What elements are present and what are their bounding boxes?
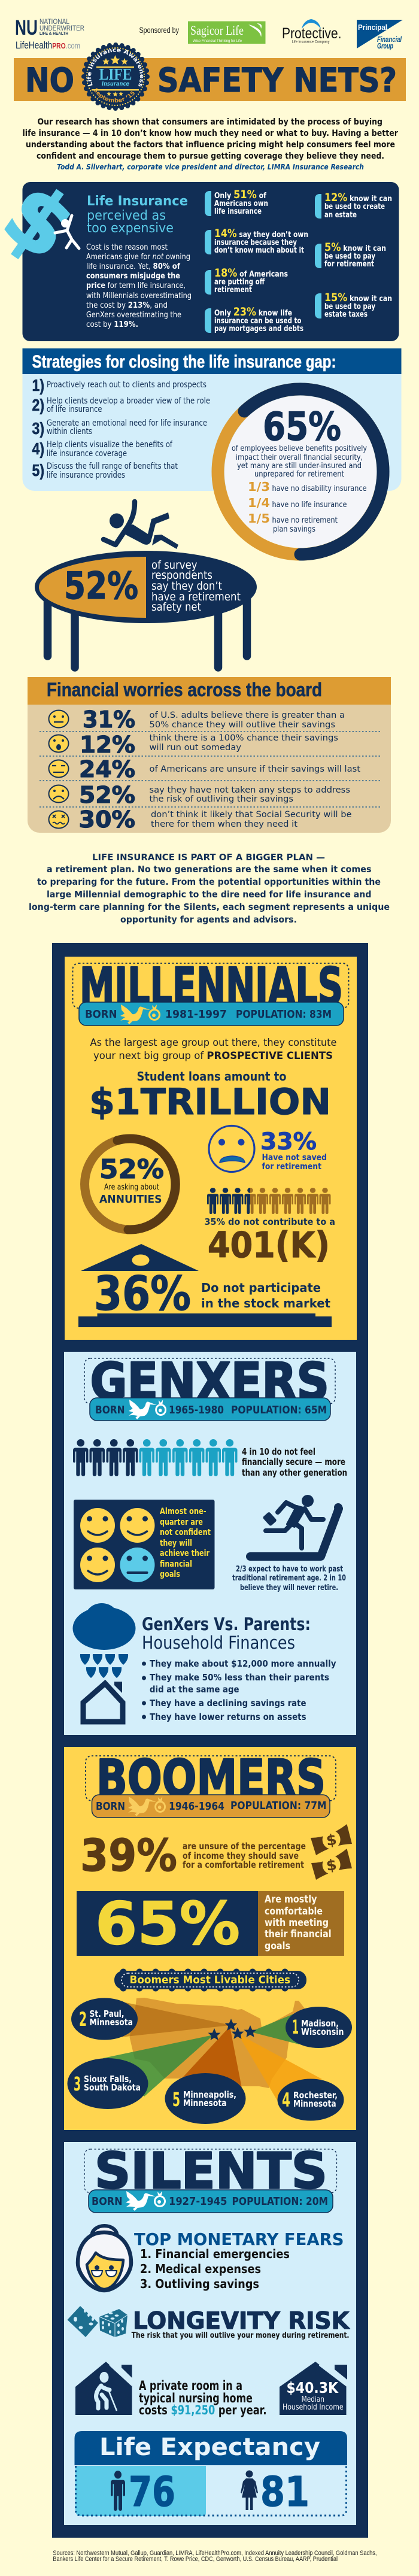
- employee benefits text: yet many are still under-insured and: [237, 462, 362, 471]
- logo: Protective: [282, 19, 341, 44]
- stats: middle column: insurance can be used to: [214, 317, 302, 326]
- stat brackets: [205, 191, 321, 333]
- people chart: 35% do not contribute: 35% do not contribute to a: [205, 1216, 335, 1227]
- city 1: Madison: 1: [292, 2016, 299, 2038]
- student loans stat: Student loans amount to: [136, 1069, 286, 1084]
- row: 12%: [49, 732, 338, 758]
- logo: Sagicor Life: Wise Financial Thinking for Life: [193, 39, 242, 43]
- stock market building: [78, 1244, 332, 1327]
- GenXers vs parents: GenXers Vs. Parents:: [142, 1614, 311, 1634]
- stock market building: Do not participate: [201, 1281, 321, 1295]
- stats: right column: be used to pay: [324, 252, 375, 261]
- people chart: 35% do not contribute: [205, 1188, 335, 1266]
- badge: Life Insurance Awareness Month: September ’15: [94, 88, 135, 103]
- row: 12%: think there is a 100% chance their savings: [150, 733, 338, 743]
- strategies header: Strategies for closing the life insurance gap:: [32, 352, 336, 372]
- smiley box: not confident: goals: [160, 1570, 180, 1579]
- row: 12%: 12%: [80, 732, 135, 758]
- row: 24%: of Americans are unsure if their savings will last: [150, 764, 361, 774]
- city 2: St. Paul: 2: [79, 2008, 87, 2031]
- cost paragraph: the cost by 213%, and: [86, 301, 168, 310]
- logo: Principal Financial Group: Principal: [358, 23, 387, 32]
- 65% comfortable stat: comfortable: [265, 1906, 323, 1917]
- logo: Protective: Protective.: [282, 25, 341, 42]
- 65% comfortable stat: goals: [265, 1940, 290, 1952]
- people chart: 4 in 10: 4 in 10 do not feel: [242, 1446, 315, 1457]
- row: 31%: of U.S. adults believe there is greater than a: [150, 711, 345, 720]
- stats: middle column: [214, 188, 308, 333]
- logo: Principal Financial Group: [357, 20, 403, 50]
- city 4: Rochester: [278, 2079, 344, 2120]
- icon: runner on treadmill: 2/3 expect to have to work past: [236, 1565, 343, 1574]
- stats: right column: estate taxes: [324, 310, 368, 319]
- house: median household income: Household Income: [283, 2403, 344, 2412]
- GenXers vs parents: did at the same age: [150, 1684, 239, 1695]
- smiley box: not confident: achieve their: [160, 1549, 210, 1558]
- city 5: Minneapolis: 5: [172, 2088, 180, 2111]
- generations frame: [52, 943, 368, 2538]
- icon: runner on treadmill: [232, 1495, 346, 1592]
- cost paragraph: GenXers overestimating the: [86, 310, 181, 320]
- stats: middle column: Americans own: [214, 199, 268, 208]
- nursing home cost: [139, 2378, 267, 2417]
- Millennials title: POPULATION: 83M: [236, 1008, 332, 1021]
- logo: Principal Financial Group: Financial: [377, 35, 402, 44]
- strategy list: 5): [32, 461, 44, 480]
- employee benefits text: impact their overall financial security,: [236, 453, 363, 462]
- strategy list: 3): [32, 419, 44, 438]
- 65% comfortable stat: 65%: [95, 1890, 240, 1958]
- nursing home cost: typical nursing home: [139, 2391, 253, 2405]
- panel: Silents: [64, 2142, 356, 2525]
- smiley box: not confident: quarter are: [160, 1518, 203, 1527]
- prospective clients text: [90, 1037, 336, 1062]
- stats: middle column: pay mortgages and debts: [214, 324, 303, 333]
- logo: LifeHealthPro.com: LifeHealthPRO.com: [16, 40, 80, 51]
- GenXers vs parents: They have a declining savings rate: [150, 1698, 306, 1709]
- stats: middle column: insurance because they: [214, 238, 297, 247]
- row: 52%: the risk of outliving their savings: [150, 794, 293, 804]
- strategy list: Proactively reach out to clients and prospects: [47, 380, 207, 390]
- sad face: 33% have not saved: for retirement: [262, 1162, 321, 1172]
- trampoline: 52% no safety net: 52%: [64, 564, 138, 608]
- panel: GenXers: [64, 1352, 356, 1735]
- stats: right column: for retirement: [324, 260, 374, 269]
- sad face: 33% have not saved: Have not saved: [262, 1153, 327, 1163]
- top monetary fears: [134, 2229, 344, 2291]
- icon: grandmother: [78, 2226, 131, 2290]
- map: livable cities: [67, 1998, 352, 2124]
- house: median household income: Median: [302, 2395, 324, 2404]
- stats: right column: 15% know it can: [324, 291, 392, 304]
- livable cities badge: Boomers Most Livable Cities: [129, 1974, 290, 1986]
- cost paragraph: consumers misjudge the: [86, 271, 180, 281]
- logo: National Underwriter: [15, 16, 84, 40]
- 39% unsure stat: for a comfortable retirement: [183, 1859, 304, 1870]
- cost paragraph: Americans give for not owning: [86, 252, 190, 262]
- logo: Sagicor Life: [188, 22, 266, 44]
- sad face: 33% have not saved: [209, 1125, 327, 1172]
- sources: Bankers Life Center for a Secure Retirement, T. Rowe Price, CDC, Genworth, U.S. Census Bureau, AARP, Prudential: [53, 2556, 338, 2563]
- stats: right column: 12% know it can: [324, 191, 392, 204]
- map beams: [103, 2002, 322, 2101]
- Millennials title: 1981-1997: [165, 1008, 227, 1021]
- row: 30%: don’t think it likely that Social Security will be: [151, 810, 352, 820]
- GenXers title: 1965-1980: [169, 1404, 224, 1416]
- 65% comfortable stat: with meeting: [265, 1917, 329, 1929]
- title banner: [14, 58, 406, 101]
- employee benefits text: unprepared for retirement: [254, 470, 344, 479]
- heading: Life Insurance: [87, 194, 188, 209]
- cost paragraph: cost by 119%.: [86, 320, 138, 329]
- logo: National Underwriter: NU: [15, 16, 38, 40]
- Silents title: POPULATION: 20M: [232, 2195, 328, 2208]
- 39% unsure stat: 39%: [80, 1830, 177, 1882]
- city 4: Rochester: 4: [282, 2089, 290, 2111]
- title banner: NO: [25, 61, 74, 99]
- city 3: Sioux Falls: Sioux Falls,: [84, 2074, 132, 2085]
- text block: life insurance is part of a bigger plan: [29, 852, 390, 925]
- cost paragraph: life insurance. Yet, 80% of: [86, 262, 180, 271]
- top monetary fears: 2. Medical expenses: [140, 2262, 261, 2276]
- Millennials title: BORN: [85, 1008, 117, 1021]
- icon: nursing home: [75, 2362, 132, 2415]
- icon: dollar bills: $: [325, 1831, 338, 1849]
- city 1: Madison: Wisconsin: [301, 2026, 344, 2037]
- intro quote: [23, 117, 398, 171]
- survey text: of survey: [151, 559, 198, 572]
- stats: right column: be used to create: [324, 202, 385, 211]
- icon: dollar bills: [311, 1824, 352, 1880]
- city 2: St. Paul: St. Paul,: [90, 2008, 125, 2019]
- panel: Millennials: [65, 957, 357, 1340]
- panel: strategies for closing the gap: [23, 348, 401, 491]
- stats: middle column: don’t know much about it: [214, 246, 304, 255]
- stock market building: in the stock market: [201, 1296, 330, 1310]
- longevity risk: LONGEVITY RISK: [133, 2308, 350, 2335]
- panel: life insurance perceived as too expensive: [0, 164, 399, 341]
- stats: middle column: Only 51% of: [214, 188, 266, 201]
- smiley box: not confident: Almost one-: [160, 1507, 207, 1516]
- survey text: say they don’t: [151, 579, 222, 593]
- row: 52%: say they have not taken any steps to address: [150, 785, 350, 795]
- GenXers title: BORN: [95, 1404, 125, 1416]
- logo: Principal Financial Group: Group: [377, 41, 393, 50]
- icon: dice: [67, 2306, 127, 2337]
- stats: middle column: 18% of Americans: [214, 266, 288, 280]
- Boomers title: POPULATION: 77M: [230, 1800, 327, 1812]
- smiley box: not confident: financial: [160, 1559, 192, 1569]
- stats: right column: [324, 191, 392, 319]
- GenXers vs parents: They make about $12,000 more annually: [150, 1658, 336, 1669]
- city 2: St. Paul: [71, 1998, 138, 2040]
- city 2: St. Paul: Minnesota: [90, 2017, 133, 2028]
- city 1: Madison: Madison,: [301, 2018, 339, 2029]
- prospective clients text: your next big group of PROSPECTIVE CLIENTS: [93, 1050, 333, 1062]
- male 76: 76: [129, 2468, 175, 2516]
- GenXers title: GENXERS: [90, 1352, 329, 1412]
- cost paragraph: [86, 242, 192, 329]
- stats: middle column: 14% say they don’t own: [214, 227, 308, 240]
- strategy list: life insurance provides: [47, 471, 125, 480]
- donut: 52% annuities: Are asking about: [104, 1183, 159, 1192]
- logo: National Underwriter: NATIONAL: [40, 17, 69, 26]
- city 5: Minneapolis: Minneapolis,: [183, 2089, 236, 2100]
- male 76: [111, 2468, 175, 2516]
- text block: life insurance is part of a bigger plan: opportunity for agents and advisors.: [120, 914, 297, 925]
- title banner: SAFETY NETS?: [157, 61, 397, 99]
- 39% unsure stat: are unsure of the percentage: [183, 1841, 306, 1852]
- Boomers title: BORN: [96, 1800, 125, 1813]
- fractions: have no retirement: [272, 516, 338, 525]
- 39% unsure stat: of income they should save: [183, 1850, 299, 1861]
- strategy list: Help clients visualize the benefits of: [47, 440, 173, 450]
- city 3: Sioux Falls: South Dakota: [84, 2082, 141, 2093]
- stats: middle column: are putting off: [214, 278, 265, 287]
- icon: runner on treadmill: believe they will never retire.: [240, 1583, 338, 1592]
- donut: 65% of employees: 65%: [263, 405, 341, 450]
- text block: life insurance is part of a bigger plan: a retirement plan. No two generations are the same when it comes: [47, 864, 372, 875]
- text block: life insurance is part of a bigger plan: to preparing for the future. From the potential opportunities within the: [37, 876, 381, 887]
- donut: 52% annuities: [85, 1139, 176, 1230]
- cost paragraph: Cost is the reason most: [86, 242, 168, 252]
- sad face: 33% have not saved: 33%: [260, 1128, 317, 1155]
- fractions: 1/4: [248, 496, 270, 510]
- GenXers vs parents: They make 50% less than their parents: [150, 1672, 329, 1683]
- donut: 65% of employees: [218, 389, 383, 554]
- house: median household income: [280, 2362, 347, 2415]
- Silents title: BORN: [92, 2195, 122, 2208]
- intro quote: Our research has shown that consumers are intimidated by the process of buying: [37, 117, 382, 127]
- Boomers title: BOOMERS: [96, 1749, 326, 1809]
- city 1: Madison: [286, 2007, 352, 2048]
- Boomers title: 1946-1964: [169, 1800, 224, 1813]
- text block: life insurance is part of a bigger plan: LIFE INSURANCE IS PART OF A BIGGER PLAN —: [92, 852, 325, 863]
- row: 31%: 50% chance they will outlive their savings: [150, 720, 335, 730]
- logo: Sagicor Life: Sagicor Life: [190, 23, 244, 38]
- row: 12%: will run out someday: [150, 743, 241, 753]
- strategy list: Help clients develop a broader view of the role: [47, 396, 210, 406]
- Millennials title: [73, 957, 348, 1025]
- stats: right column: an estate: [324, 211, 357, 220]
- longevity risk: The risk that you will outlive your money during retirement.: [132, 2331, 350, 2340]
- map stars: [208, 2019, 256, 2040]
- people chart: 4 in 10: than any other generation: [242, 1467, 347, 1478]
- nursing home cost: A private room in a: [139, 2378, 242, 2393]
- 39% unsure stat: [80, 1830, 306, 1882]
- survey text: have a retirement: [151, 590, 241, 603]
- life expectancy: [74, 2431, 347, 2516]
- logo: National Underwriter: UNDERWRITER: [40, 24, 84, 32]
- smiley box: not confident: not confident: [160, 1528, 211, 1537]
- cost paragraph: price for term life insurance,: [86, 281, 186, 290]
- stock market building: 36%: [94, 1267, 191, 1321]
- city 4: Rochester: Minnesota: [293, 2098, 336, 2109]
- strategy list: Discuss the full range of benefits that: [47, 462, 178, 471]
- fractions: [248, 480, 366, 534]
- map shape: [129, 1998, 305, 2088]
- city 5: Minneapolis: Minnesota: [183, 2098, 227, 2108]
- 65% comfortable stat: their financial: [265, 1928, 332, 1940]
- sources: [53, 2550, 377, 2563]
- row: 30%: 30%: [79, 806, 135, 833]
- strategy list: 2): [32, 396, 44, 414]
- stats: middle column: life insurance: [214, 207, 262, 216]
- life expectancy: Life Expectancy: [99, 2434, 320, 2461]
- people chart: 35% do not contribute: 401(K): [208, 1224, 330, 1266]
- strategy list: of life insurance: [47, 405, 102, 414]
- trampoline legs: [48, 599, 247, 667]
- text block: life insurance is part of a bigger plan: long-term care planning for the Silents, each segment represents a unique: [29, 902, 390, 912]
- row: 31%: 31%: [83, 706, 135, 733]
- student loans stat: $1TRILLION: [89, 1081, 331, 1123]
- smiley box: not confident: they will: [160, 1539, 192, 1548]
- heading: perceived as: [87, 208, 166, 223]
- city 4: Rochester: Rochester,: [293, 2090, 338, 2101]
- employee benefits text: [232, 444, 367, 479]
- icon: raincloud over house: [73, 1603, 135, 1722]
- icon: falling figure: [104, 502, 178, 549]
- Silents title: SILENTS: [95, 2142, 327, 2200]
- strategy list: 1): [32, 376, 44, 395]
- row: 24%: [49, 756, 361, 782]
- strategy list: Generate an emotional need for life insurance: [47, 418, 207, 428]
- GenXers vs parents: Household Finances: [142, 1633, 295, 1653]
- donut: 52% annuities: ANNUITIES: [99, 1193, 162, 1206]
- city 3: Sioux Falls: 3: [74, 2073, 81, 2095]
- row: 24%: 24%: [79, 756, 135, 782]
- trampoline: 52% no safety net: [35, 551, 257, 667]
- 65% comfortable stat: Are mostly: [265, 1894, 317, 1906]
- survey text: respondents: [151, 569, 212, 582]
- row: 52%: 52%: [79, 782, 135, 808]
- smiley box: not confident: [74, 1500, 214, 1589]
- heading: [87, 194, 188, 236]
- city 5: Minneapolis: [165, 2073, 245, 2124]
- strategy list: within clients: [47, 427, 92, 436]
- GenXers title: POPULATION: 65M: [231, 1404, 327, 1416]
- row: 30%: there for them when they need it: [151, 820, 298, 829]
- survey text: safety net: [151, 600, 201, 614]
- strategy list: 4): [32, 439, 44, 458]
- logo: National Underwriter: LIFE & HEALTH: [40, 32, 68, 36]
- logo: Protective: Life Insurance Company: [292, 41, 329, 44]
- people chart: 4 in 10: financially secure — more: [242, 1457, 345, 1467]
- icon: runner on treadmill: traditional retirement age. 2 in 10: [232, 1574, 346, 1583]
- worries header: [28, 677, 391, 705]
- panel: financial worries across the board: [28, 677, 391, 833]
- strategy list: [32, 376, 210, 480]
- top monetary fears: 3. Outliving savings: [140, 2277, 259, 2291]
- city 3: Sioux Falls: [67, 2058, 148, 2109]
- GenXers vs parents: [142, 1614, 336, 1722]
- 65% comfortable stat: [77, 1890, 344, 1958]
- people chart: 4 in 10: [73, 1439, 347, 1478]
- stats: middle column: retirement: [214, 286, 252, 295]
- house: median household income: $40.3K: [286, 2379, 339, 2396]
- cost paragraph: with Millennials overestimating: [86, 291, 192, 301]
- GenXers vs parents: They have lower returns on assets: [150, 1712, 306, 1722]
- Silents title: 1927-1945: [169, 2195, 227, 2208]
- text block: life insurance is part of a bigger plan: large Millennial demographic to the dire need for life insurance and: [47, 889, 371, 900]
- row: 30%: [49, 806, 352, 833]
- quote attribution: Todd A. Silverhart, corporate vice president and director, LIMRA Insurance Research: [57, 163, 364, 171]
- fractions: have no life insurance: [272, 500, 347, 509]
- sponsored by label: Sponsored by: [139, 25, 179, 35]
- fractions: have no disability insurance: [272, 484, 366, 493]
- top monetary fears: TOP MONETARY FEARS: [134, 2229, 344, 2249]
- top monetary fears: 1. Financial emergencies: [140, 2247, 290, 2261]
- stats: right column: be used to pay: [324, 302, 375, 311]
- intro quote: confident and encourage them to pursue getting coverage they believe they need.: [37, 151, 384, 161]
- badge: Life Insurance Awareness Month: [81, 43, 150, 111]
- heading: too expensive: [87, 221, 174, 236]
- donut: 52% annuities: 52%: [99, 1154, 164, 1185]
- survey text: [151, 559, 241, 614]
- header logos and sponsors: [15, 16, 403, 51]
- fractions: 1/5: [248, 511, 270, 526]
- female 81: [241, 2468, 309, 2516]
- nursing home cost: costs $91,250 per year.: [139, 2403, 267, 2417]
- fractions: 1/3: [248, 480, 270, 494]
- worries header: Financial worries across the board: [47, 679, 322, 700]
- row: 31%: [49, 706, 345, 733]
- prospective clients text: As the largest age group out there, they constitute: [90, 1037, 336, 1049]
- female 81: 81: [260, 2468, 309, 2516]
- livable cities badge: [114, 1971, 306, 1989]
- fractions: plan savings: [273, 525, 315, 534]
- employee benefits text: of employees believe benefits positively: [232, 444, 367, 453]
- strategy list: life insurance coverage: [47, 449, 127, 459]
- stats: right column: 5% know it can: [324, 241, 386, 254]
- row: 52%: [49, 782, 350, 808]
- panel: Boomers: [64, 1747, 356, 2130]
- badge: Life Insurance Awareness Month: LIFE: [99, 65, 132, 83]
- stats: middle column: Only 23% know life: [214, 305, 292, 318]
- badge: Life Insurance Awareness Month: Insurance: [102, 81, 129, 87]
- icon: dollar bills: $: [325, 1856, 338, 1874]
